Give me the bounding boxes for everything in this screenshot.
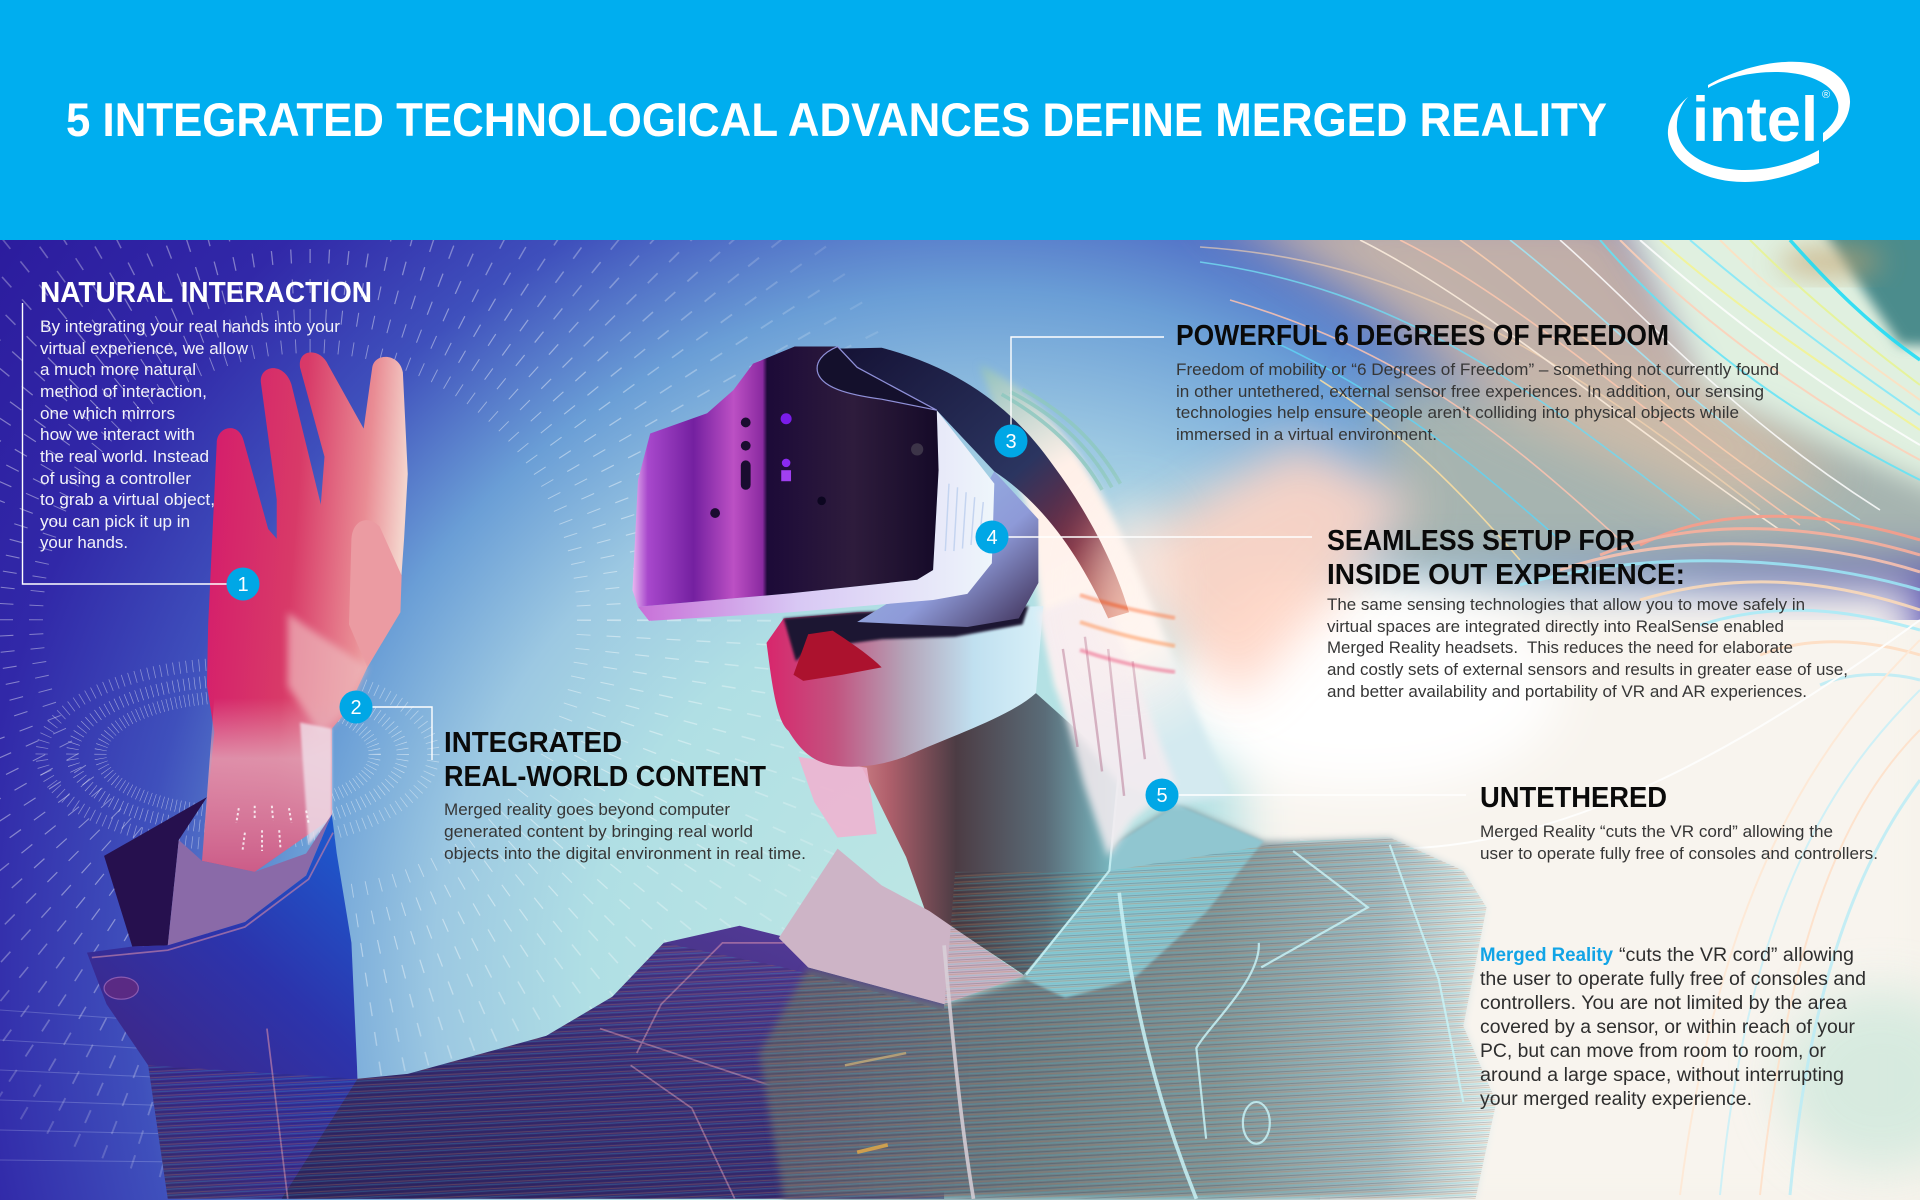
neck xyxy=(823,693,1119,975)
merged reality paragraph: the user to operate fully free of consoles and xyxy=(1480,969,1866,990)
callout 3: powerful 6 degrees of freedom xyxy=(994,320,1779,458)
body 4: virtual spaces are integrated directly into RealSense enabled xyxy=(1327,617,1784,636)
marker 5 xyxy=(1146,778,1178,812)
Intel logo: ® xyxy=(1822,89,1830,101)
merged reality paragraph: PC, but can move from room to room, or xyxy=(1480,1041,1827,1062)
knit cuff xyxy=(168,814,332,945)
hoodie and see-through jacket xyxy=(759,804,1496,1199)
face gasket xyxy=(857,471,1038,627)
body 2: generated content by bringing real world xyxy=(444,822,753,841)
marker 3: 3 xyxy=(1005,431,1017,453)
marker 3 xyxy=(994,424,1028,458)
mint corner xyxy=(1780,990,1920,1170)
marker 1 xyxy=(226,568,260,600)
headset sensors xyxy=(710,413,923,518)
marker 2 xyxy=(340,690,372,724)
palm shading xyxy=(288,612,367,735)
callout 1: natural interaction xyxy=(22,277,372,600)
teal hoodie patch xyxy=(1024,804,1264,998)
merged reality paragraph: Merged Reality xyxy=(1480,945,1613,966)
body 3: technologies help ensure people aren’t colliding into physical objects while xyxy=(1176,403,1739,422)
body 5 xyxy=(1480,822,1878,863)
body 4: Merged Reality headsets. This reduces the need for elaborate xyxy=(1327,638,1793,657)
face xyxy=(767,606,1043,767)
lips xyxy=(793,631,882,681)
upper right grey zone xyxy=(1380,380,1920,570)
body 3: in other untethered, external sensor free experiences. In addition, our sensing xyxy=(1176,382,1764,401)
heading 2: INTEGRATED xyxy=(444,727,622,759)
connector 4 xyxy=(1008,536,1312,538)
jacket sleeve xyxy=(87,814,380,1199)
connector 2 xyxy=(372,707,432,760)
wrist dotted ring xyxy=(42,664,433,845)
merged reality paragraph: covered by a sensor, or within reach of your xyxy=(1480,1017,1856,1038)
body 4: and costly sets of external sensors and results in greater ease of use, xyxy=(1327,660,1848,679)
heading 5: UNTETHERED xyxy=(1480,782,1667,814)
merged reality paragraph xyxy=(1480,945,1866,1110)
image stripes overlay xyxy=(148,838,1496,1199)
front hair strands over neck xyxy=(1038,588,1176,857)
connector 5 xyxy=(1178,794,1466,796)
body 1: method of interaction, xyxy=(40,382,207,401)
callout 2: integrated real-world content xyxy=(340,690,806,863)
body 1: you can pick it up in xyxy=(40,512,190,531)
body 5: user to operate fully free of consoles and controllers. xyxy=(1480,844,1878,863)
hair shading lines xyxy=(1063,637,1145,796)
Intel logo: intel xyxy=(1692,85,1818,155)
teal corner xyxy=(1820,240,1920,354)
jacket back collar xyxy=(104,797,207,947)
body 4: The same sensing technologies that allow you to move safely in xyxy=(1327,595,1805,614)
heading 4: INSIDE OUT EXPERIENCE: xyxy=(1327,559,1685,591)
jacket lines xyxy=(845,768,1463,1199)
body 2: objects into the digital environment in real time. xyxy=(444,844,806,863)
callout 4: seamless setup xyxy=(976,520,1848,701)
connector 1 xyxy=(22,303,227,584)
wrist highlight xyxy=(300,722,332,845)
body 1: how we interact with xyxy=(40,425,195,444)
radial dotted rays xyxy=(0,240,878,1178)
heading 2 xyxy=(444,727,766,793)
tan ribbon xyxy=(1210,240,1834,524)
header band xyxy=(0,0,1920,240)
body 1: virtual experience, we allow xyxy=(40,339,249,358)
side panel vents xyxy=(945,484,983,551)
body 3: Freedom of mobility or “6 Degrees of Freedom” – something not currently found xyxy=(1176,360,1779,379)
headset front xyxy=(632,347,939,607)
heading 2: REAL-WORLD CONTENT xyxy=(444,761,766,793)
shadow under headset xyxy=(784,606,1029,661)
heading 1: NATURAL INTERACTION xyxy=(40,277,372,309)
jacket torso xyxy=(282,926,944,1199)
body 3 xyxy=(1176,360,1779,444)
heading 4 xyxy=(1327,525,1685,591)
merged reality paragraph: controllers. You are not limited by the area xyxy=(1480,993,1847,1014)
marker 1: 1 xyxy=(237,574,249,596)
title: 5 INTEGRATED TECHNOLOGICAL ADVANCES DEFINE MERGED REALITY xyxy=(66,93,1607,146)
body 1: your hands. xyxy=(40,533,128,552)
orange glow behind hair xyxy=(1090,440,1420,700)
body 1: of using a controller xyxy=(40,469,191,488)
white side panel xyxy=(638,410,994,621)
headset strap xyxy=(818,348,1129,618)
body 1: one which mirrors xyxy=(40,404,175,423)
white glow xyxy=(1160,590,1560,790)
body 4 xyxy=(1327,595,1848,701)
merged reality paragraph: your merged reality experience. xyxy=(1480,1089,1752,1110)
body 1 xyxy=(40,317,340,552)
marker 5: 5 xyxy=(1156,785,1168,807)
body 5: Merged Reality “cuts the VR cord” allowing the xyxy=(1480,822,1833,841)
Intel logo xyxy=(1668,62,1850,182)
body 2: Merged reality goes beyond computer xyxy=(444,800,730,819)
connector 3 xyxy=(1011,337,1164,425)
bright band xyxy=(1611,240,1920,498)
hair lower pink strands xyxy=(798,757,877,838)
headset top ridge xyxy=(817,347,937,410)
heading 3: POWERFUL 6 DEGREES OF FREEDOM xyxy=(1176,320,1669,352)
background light lines lower left xyxy=(0,1010,185,1162)
woman wearing VR headset xyxy=(87,347,1496,1199)
hair glow streaks xyxy=(1080,500,1175,680)
teal hair over strap xyxy=(1002,389,1120,490)
body 1: to grab a virtual object, xyxy=(40,490,215,509)
merged reality paragraph: “cuts the VR cord” allowing xyxy=(1619,945,1854,966)
hood collar xyxy=(779,849,1024,1004)
callout 5: untethered xyxy=(1146,778,1878,863)
body 2 xyxy=(444,800,806,863)
marker 4: 4 xyxy=(986,527,998,549)
body 3: immersed in a virtual environment. xyxy=(1176,425,1437,444)
marker 2: 2 xyxy=(350,697,362,719)
heading 4: SEAMLESS SETUP FOR xyxy=(1327,525,1635,557)
body 1: the real world. Instead xyxy=(40,447,209,466)
jacket stitching xyxy=(92,833,784,1199)
wrist xyxy=(202,698,355,872)
body 1: By integrating your real hands into your xyxy=(40,317,340,336)
thumb xyxy=(349,520,402,667)
hand xyxy=(202,352,408,872)
marker 4 xyxy=(976,520,1008,554)
hair back xyxy=(980,365,1231,804)
wrist dots xyxy=(236,806,309,851)
pastel light swirls xyxy=(1200,240,1920,1195)
body 1: a much more natural xyxy=(40,360,196,379)
body 4: and better availability and portability of VR and AR experiences. xyxy=(1327,682,1807,701)
merged reality paragraph: around a large space, without interrupting xyxy=(1480,1065,1844,1086)
cuff button xyxy=(104,977,138,999)
